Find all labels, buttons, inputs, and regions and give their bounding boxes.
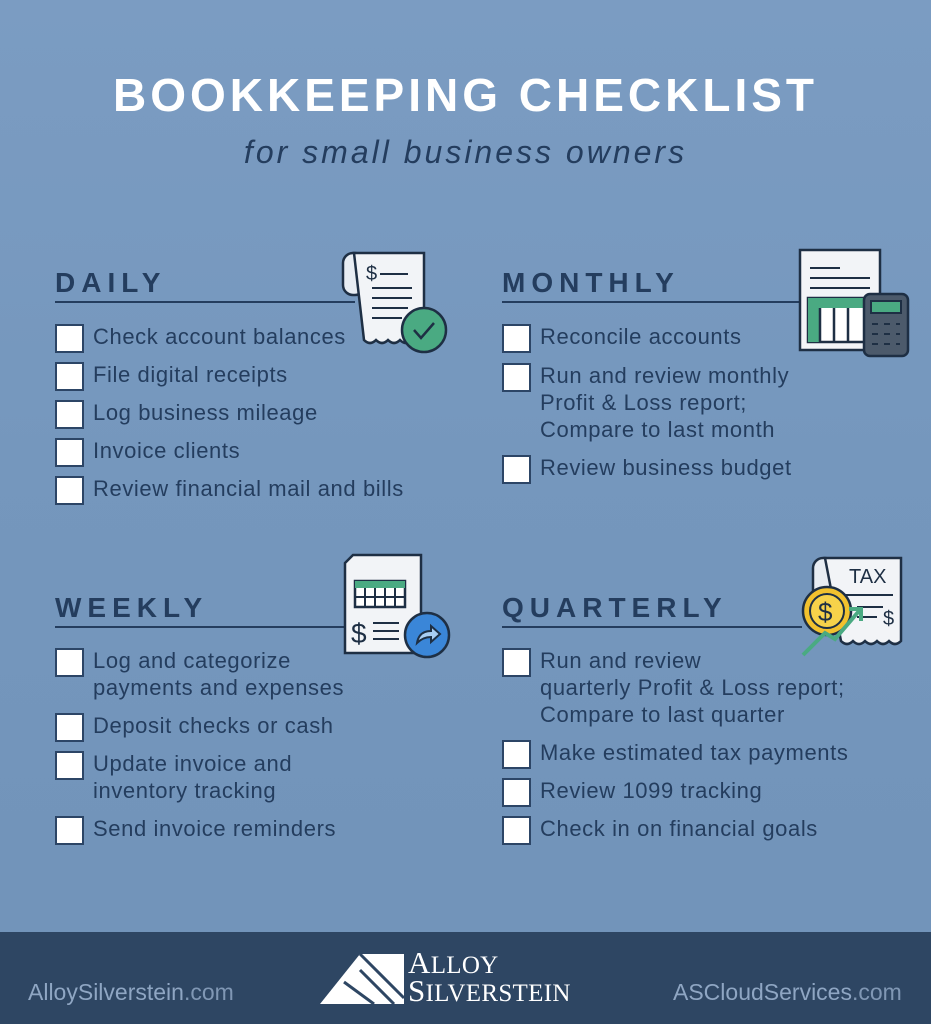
- item: P&L quarterly: [502, 647, 882, 728]
- item: update invoice: inventory tracking: [93, 778, 276, 803]
- item: P&L quarterly: Run and review: [540, 648, 701, 673]
- item: log and categorize: payments and expenses: [93, 675, 344, 700]
- item: deposit: Deposit checks or cash: [93, 713, 334, 738]
- icon: tax form with coin: TAX: [849, 566, 886, 588]
- footer: [0, 932, 931, 1024]
- heading: daily: DAILY: [55, 267, 166, 298]
- item: budget: Review business budget: [540, 455, 792, 480]
- item: P&L quarterly: quarterly Profit & Loss report;: [540, 675, 845, 700]
- logo: [320, 945, 571, 1008]
- item: update invoice: [55, 750, 292, 804]
- item: P&L monthly: Compare to last month: [540, 417, 775, 442]
- item: update invoice: Update invoice and: [93, 751, 292, 776]
- item: log and categorize: Log and categorize: [93, 648, 291, 673]
- panel: daily: [55, 267, 404, 505]
- subtitle: for small business owners: [244, 134, 687, 170]
- item: P&L monthly: [502, 362, 842, 443]
- title: BOOKKEEPING CHECKLIST: [113, 69, 818, 121]
- item: estimated tax: Make estimated tax payments: [540, 740, 848, 765]
- logo text: SILVERSTEIN: [408, 973, 571, 1008]
- icon: logo mark: [320, 954, 404, 1004]
- icon: tax form with coin: [802, 556, 902, 656]
- heading: weekly: WEEKLY: [55, 592, 208, 623]
- item: reconcile: Reconcile accounts: [540, 324, 742, 349]
- heading: quarterly: QUARTERLY: [502, 592, 728, 623]
- item: P&L quarterly: Compare to last quarter: [540, 702, 785, 727]
- logo text: ALLOY: [408, 945, 499, 980]
- icon: invoice with arrow: $: [351, 618, 367, 649]
- item: P&L monthly: Profit & Loss report;: [540, 390, 747, 415]
- item: check account balances: Check account balances: [93, 324, 346, 349]
- item: review mail: Review financial mail and bills: [93, 476, 404, 501]
- item: file digital receipts: File digital receipts: [93, 362, 288, 387]
- panel: weekly: [55, 592, 344, 845]
- heading: monthly: MONTHLY: [502, 267, 680, 298]
- icon: tax form with coin: $: [818, 597, 833, 627]
- footer link left: AlloySilverstein.com: [28, 979, 234, 1005]
- item: invoice clients: Invoice clients: [93, 438, 240, 463]
- item: P&L monthly: Run and review monthly: [540, 363, 789, 388]
- panel: monthly: [502, 267, 799, 484]
- item: log mileage: Log business mileage: [93, 400, 318, 425]
- icon: receipt with check: [342, 252, 448, 354]
- item: log and categorize: [55, 647, 344, 701]
- item: 1099: Review 1099 tracking: [540, 778, 762, 803]
- icon: tax form with coin: $: [883, 608, 894, 630]
- logo text: [408, 945, 571, 1008]
- footer link right: ASCloudServices.com: [673, 979, 902, 1005]
- icon: receipt with check: $: [366, 263, 377, 285]
- panel: quarterly: [502, 592, 848, 845]
- icon: invoice with arrow: [344, 554, 450, 658]
- item: goals: Check in on financial goals: [540, 816, 818, 841]
- icon: spreadsheet and calculator: [798, 248, 910, 358]
- item: reminders: Send invoice reminders: [93, 816, 336, 841]
